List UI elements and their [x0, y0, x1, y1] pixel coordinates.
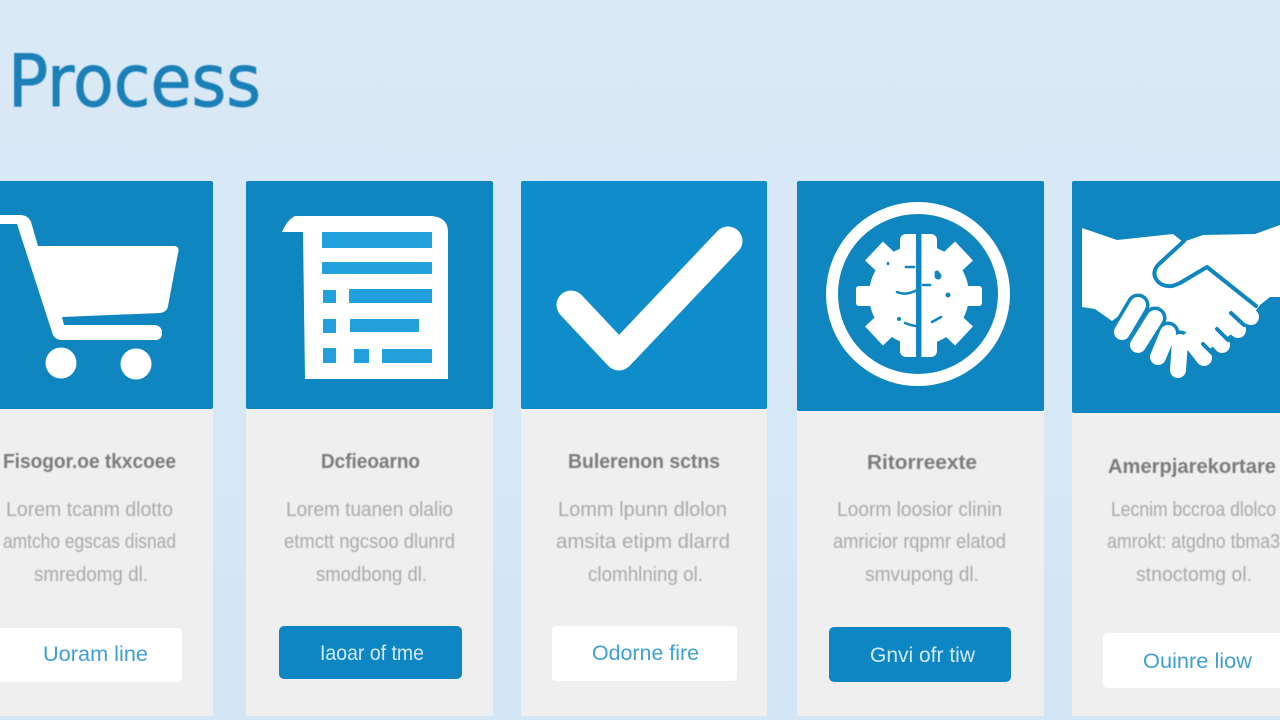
card body	[0, 400, 213, 716]
card description: smvupong dl.	[865, 564, 979, 586]
panel: card 3 check mark	[521, 181, 767, 716]
panel: card 1 cart	[0, 181, 213, 716]
card description: clomhlning ol.	[588, 564, 703, 586]
card description: smodbong dl.	[316, 564, 427, 586]
button	[1103, 633, 1280, 688]
card description	[3, 499, 176, 586]
icon: handshake	[1082, 225, 1280, 370]
icon: gear brain in circle	[832, 208, 1004, 380]
card description: amsita etipm dlarrd	[556, 531, 730, 553]
card body	[1072, 400, 1280, 716]
card heading: Fisogor.oe tkxcoee	[3, 451, 176, 473]
icon: check mark	[571, 241, 728, 356]
button	[0, 628, 182, 682]
card description: smredomg dl.	[34, 564, 148, 586]
card description	[1107, 499, 1280, 586]
panel: card 5 handshake	[1072, 181, 1280, 716]
card description: Lomm lpunn dlolon	[558, 499, 727, 521]
card description	[833, 499, 1006, 586]
button: Odorne fire	[592, 642, 699, 665]
card header	[246, 181, 493, 409]
panel: card 2 document	[246, 181, 493, 716]
icon: shopping cart	[0, 215, 179, 380]
card header	[1072, 181, 1280, 413]
card description: etmctt ngcsoo dlunrd	[284, 531, 455, 553]
title: Process	[8, 39, 261, 123]
card description	[284, 499, 455, 586]
card body	[246, 400, 493, 716]
card body	[521, 400, 767, 716]
button: Gnvi ofr tiw	[870, 644, 976, 667]
button	[279, 626, 462, 679]
button: Uoram line	[43, 643, 148, 666]
card description: amtcho egscas disnad	[3, 531, 176, 553]
card description: Lorem tcanm dlotto	[6, 499, 173, 521]
button: Ouinre liow	[1143, 650, 1253, 673]
card description: amricior rqpmr elatod	[833, 531, 1006, 553]
card description: Lorem tuanen olalio	[286, 499, 453, 521]
button	[552, 626, 737, 681]
card heading: Ritorreexte	[867, 452, 977, 474]
button	[829, 627, 1011, 682]
card description: stnoctomg ol.	[1136, 564, 1252, 586]
panel: card 4 gear brain	[797, 181, 1044, 716]
card body	[797, 400, 1044, 716]
card header	[0, 181, 213, 409]
card heading: Bulerenon sctns	[568, 451, 720, 473]
card heading: Amerpjarekortare	[1108, 456, 1276, 478]
icon: document list	[282, 216, 448, 379]
card header	[797, 181, 1044, 411]
card description: Loorm loosior clinin	[837, 499, 1002, 521]
card heading: Dcfieoarno	[321, 451, 420, 473]
button: Iaoar of tme	[320, 642, 424, 665]
card description	[556, 499, 730, 586]
card header	[521, 181, 767, 409]
